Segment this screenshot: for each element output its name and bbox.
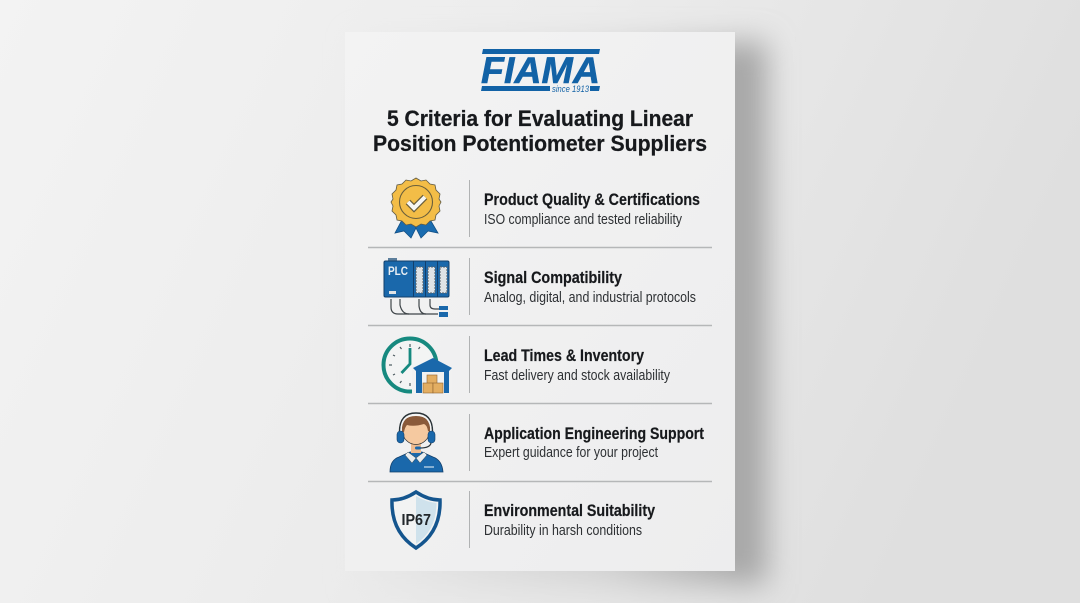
text: environmental suitability: Durability in harsh conditions xyxy=(484,522,642,539)
text: signal compatibility xyxy=(484,269,696,306)
dividers xyxy=(368,180,712,548)
text: lead times: Lead Times & Inventory xyxy=(484,347,645,365)
text: lead times xyxy=(484,347,670,384)
text: product quality: ISO compliance and tested reliability xyxy=(484,211,682,228)
icon: IP67 shield xyxy=(392,492,440,548)
title: 5 Criteria for Evaluating Linear xyxy=(387,106,693,131)
panel: document sheet xyxy=(345,32,735,571)
text: lead times: Fast delivery and stock availability xyxy=(484,367,670,384)
title xyxy=(373,106,707,156)
text: application engineering: Expert guidance for your project xyxy=(484,444,659,461)
text: signal compatibility: Analog, digital, and industrial protocols xyxy=(484,289,696,306)
icon: support agent with headset xyxy=(390,413,443,472)
icon: clock and warehouse xyxy=(384,338,452,394)
text: product quality: Product Quality & Certifications xyxy=(484,191,700,209)
logo: FIAMA since 1913: FIAMA xyxy=(481,50,600,91)
text: product quality xyxy=(484,191,700,228)
icon: IP67 shield: IP67 xyxy=(402,512,431,529)
text: environmental suitability xyxy=(484,502,656,539)
icon: PLC module xyxy=(384,258,449,317)
icon: PLC module: PLC xyxy=(388,266,408,278)
title: Position Potentiometer Suppliers xyxy=(373,131,707,156)
text: signal compatibility: Signal Compatibility xyxy=(484,269,623,287)
text: environmental suitability: Environmental Suitability xyxy=(484,502,656,520)
paper shadow xyxy=(358,42,766,584)
logo: FIAMA since 1913: since 1913 xyxy=(552,84,589,94)
text: application engineering: Application Engineering Support xyxy=(484,425,704,443)
text: application engineering xyxy=(484,425,704,461)
icon: quality badge with ribbon xyxy=(391,178,441,238)
